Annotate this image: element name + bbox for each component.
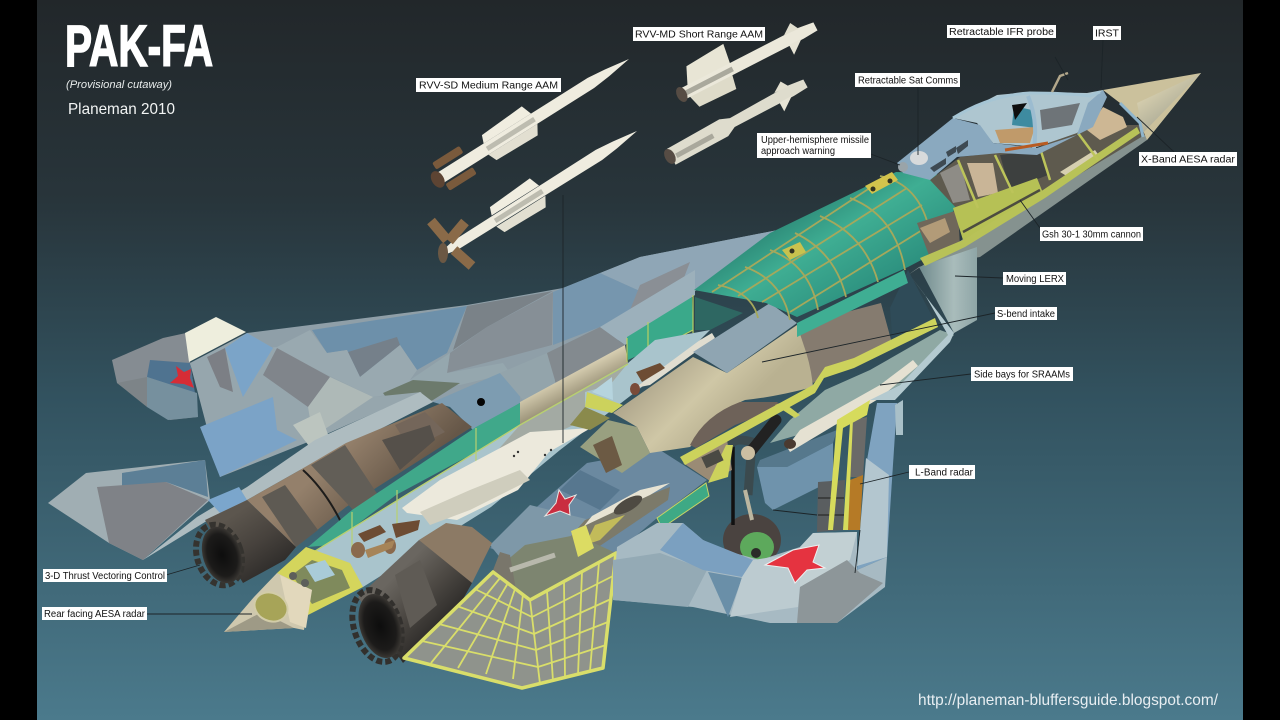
L-band radar bay [817,400,870,532]
large red star [765,545,825,583]
leader lines [147,40,1174,614]
equipment box [701,449,724,468]
far tail surface [112,333,198,420]
bay door hinge strut [490,525,616,600]
interior behind gear [683,440,732,481]
rear fuselage spine [433,270,695,430]
canopy glass [953,90,1103,147]
tan ventral tube [520,345,628,425]
missile: RVV-MD upper [665,3,824,115]
side bay panel and missile [770,330,954,452]
teal band [797,270,908,337]
label: missile approach warning [757,133,871,158]
yellow structural rail [680,318,938,483]
subtitle: (Provisional cutaway) [66,79,172,91]
rear fuselage light strip [143,392,433,560]
missile: RVV-MD lower [659,72,812,172]
green bay panels aft [627,295,743,364]
label: missile approach warning: Upper-hemisphere missile [761,135,869,146]
outer intake skin [870,273,954,400]
tyre [723,514,781,566]
label: thrust vectoring: 3-D Thrust Vectoring Control [45,571,165,582]
weapons-bay door blue surface [757,430,837,510]
missile launcher clusters [351,520,420,558]
upper engine tube [247,403,472,547]
lower weapon bay [312,330,710,587]
rear sensor yellow frame [277,547,363,615]
canopy frame [897,90,1143,180]
lower fuselage underside grey [908,73,1201,275]
IFR probe [1052,73,1068,92]
hub [740,532,774,562]
wing weapon bay [550,487,670,562]
yellow bay frame [570,392,623,430]
aft bay missile launcher [630,333,715,395]
black port on spine [477,398,485,406]
label: LERX: Moving LERX [1006,274,1064,285]
green fuselage strip [308,403,520,547]
lower wing with star [490,450,709,575]
label: sat comms: Retractable Sat Comms [858,76,958,86]
rear radar cone [224,572,312,632]
label: IRST: IRST [1095,28,1119,40]
label: cannon: Gsh 30-1 30mm cannon [1042,230,1141,240]
upper panel hatch [693,303,797,373]
label: L-band: L-Band radar [915,468,974,478]
author credit: Planeman 2010 [68,101,175,118]
label: IRST [1093,26,1121,40]
yellow wire-frame bay door [404,553,616,688]
S-bend intake duct [580,325,813,473]
canopy forward bays [917,107,1148,258]
nose cone [1103,73,1201,140]
side intake wall [857,400,903,570]
lower tailplane [48,460,210,560]
website url: http://planeman-bluffersguide.blogspot.com/ [918,692,1219,709]
label: RVV-SD: RVV-SD Medium Range AAM [419,80,558,92]
missile: RVV-SD upper [424,45,638,196]
sat comms dome [910,151,928,165]
yellow cannon bay frame [920,127,1140,266]
pilot [995,103,1080,143]
vertical tail [170,317,422,477]
LERX panel [919,247,977,333]
label: side bays: Side bays for SRAAMs [974,370,1070,380]
lower engine nozzle [344,540,472,668]
label: missile approach warning: approach warning [761,146,835,157]
label: RVV-MD: RVV-MD Short Range AAM [635,30,763,40]
label: IFR probe: Retractable IFR probe [949,27,1054,38]
teal skin panels [694,172,958,320]
dark intake interior [797,270,935,383]
label: S-bend: S-bend intake [997,309,1055,320]
star on tail [170,366,194,388]
missile: RVV-SD lower [431,117,646,266]
main lower wing surface [613,523,887,623]
label: X-band radar: X-Band AESA radar [1141,154,1236,166]
green bay segment [657,483,709,528]
far wing [247,230,778,440]
landing gear [723,420,781,566]
lower engine tube [419,523,492,583]
missile warning sensor [898,162,908,172]
lower wing star [545,490,576,516]
missile in bay [402,428,591,525]
title: PAK-FA [65,14,213,79]
upper engine nozzle [188,485,318,591]
tail fin tip [185,317,246,362]
L-band orange array [847,475,863,530]
label: L-band [909,465,975,479]
label: rear radar: Rear facing AESA radar [44,609,146,620]
